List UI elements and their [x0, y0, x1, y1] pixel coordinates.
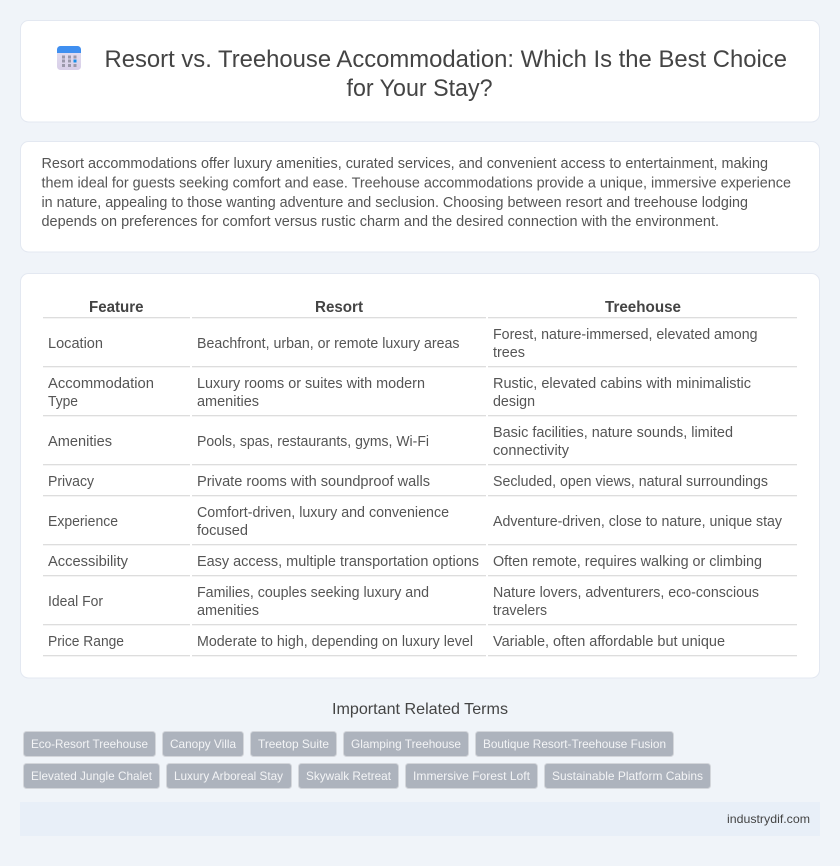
text block: introduction paragraph: [42, 156, 791, 230]
related term tags: Canopy Villa: [170, 737, 236, 751]
panel: introduction: [20, 142, 820, 252]
related term tags: Boutique Resort-Treehouse Fusion: [483, 737, 666, 751]
row: accommodation type: Luxury rooms or suites with modern: [197, 376, 425, 392]
row: price range: Moderate to high, depending on luxury level: [197, 634, 473, 650]
row: location: trees: [493, 345, 525, 361]
row: accessibility: Accessibility: [48, 554, 129, 570]
footer: industrydif.com: [727, 812, 810, 826]
row: accommodation type: Accommodation: [48, 376, 154, 392]
row: privacy: [48, 474, 768, 490]
row: ideal for: Ideal For: [48, 594, 103, 610]
related term tags: Skywalk Retreat: [306, 769, 392, 783]
row: accommodation type: amenities: [197, 394, 259, 410]
row: price range: [48, 634, 725, 650]
row: location: Forest, nature-immersed, elevated among: [493, 327, 758, 343]
heading: important related terms: Important Related Terms: [332, 701, 508, 718]
row: price range: Variable, often affordable but unique: [493, 634, 725, 650]
related term tags: [24, 732, 710, 788]
row: accommodation type: [48, 376, 751, 410]
row: experience: Comfort-driven, luxury and convenience: [197, 505, 449, 521]
row: location: Beachfront, urban, or remote luxury areas: [197, 336, 460, 352]
row: amenities: Basic facilities, nature sounds, limited: [493, 425, 733, 441]
table header: Resort: [315, 299, 364, 316]
text block: introduction paragraph: depends on preferences for comfort versus rustic charm and the desired connection with the environment.: [42, 214, 719, 230]
row: ideal for: travelers: [493, 603, 547, 619]
title: [104, 46, 787, 102]
text block: introduction paragraph: Resort accommodations offer luxury amenities, curated services, and convenient access to entertainment, making: [42, 156, 768, 172]
footer: [20, 802, 820, 836]
row: experience: Experience: [48, 514, 118, 530]
table header: [89, 299, 681, 316]
row: accessibility: Often remote, requires walking or climbing: [493, 554, 762, 570]
row: accessibility: [48, 554, 762, 570]
row: privacy: Private rooms with soundproof walls: [197, 474, 430, 490]
related term tags: Immersive Forest Loft: [413, 769, 531, 783]
row: ideal for: Families, couples seeking luxury and: [197, 585, 429, 601]
row: amenities: Amenities: [48, 434, 112, 450]
row: privacy: Privacy: [48, 474, 95, 490]
row: experience: focused: [197, 523, 248, 539]
row: accessibility: Easy access, multiple transportation options: [197, 554, 479, 570]
row: accommodation type: Type: [48, 394, 78, 410]
row: amenities: Pools, spas, restaurants, gyms, Wi-Fi: [197, 434, 429, 450]
row: privacy: Secluded, open views, natural surroundings: [493, 474, 768, 490]
panel: title card: [20, 20, 820, 122]
row: ideal for: [48, 585, 759, 619]
row: location: Location: [48, 336, 103, 352]
icon: calendar: [57, 46, 81, 70]
related term tags: Elevated Jungle Chalet: [31, 769, 153, 783]
related term tags: Glamping Treehouse: [351, 737, 461, 751]
row: location: [48, 327, 758, 361]
row: experience: [48, 505, 783, 539]
panel: comparison table: [20, 274, 820, 678]
row: ideal for: amenities: [197, 603, 259, 619]
row: accommodation type: design: [493, 394, 535, 410]
row: amenities: [48, 425, 733, 459]
related term tags: Eco-Resort Treehouse: [31, 737, 148, 751]
title: Resort vs. Treehouse Accommodation: Which Is the Best Choice: [104, 46, 787, 73]
row: price range: Price Range: [48, 634, 124, 650]
title: for Your Stay?: [346, 75, 492, 102]
related term tags: Treetop Suite: [258, 737, 329, 751]
table header: Treehouse: [605, 299, 681, 316]
row: experience: Adventure-driven, close to nature, unique stay: [493, 514, 783, 530]
text block: introduction paragraph: in nature, appealing to those wanting adventure and seclusion. Choosing between resort and treehouse lodging: [42, 195, 748, 211]
row: ideal for: Nature lovers, adventurers, eco-conscious: [493, 585, 759, 601]
row: amenities: connectivity: [493, 443, 570, 459]
related term tags: Sustainable Platform Cabins: [552, 769, 703, 783]
text block: introduction paragraph: them ideal for guests seeking comfort and ease. Treehouse accommodations provide a unique, immersive experience: [42, 176, 791, 192]
table header: Feature: [89, 299, 144, 316]
related term tags: Luxury Arboreal Stay: [174, 769, 283, 783]
row: accommodation type: Rustic, elevated cabins with minimalistic: [493, 376, 751, 392]
